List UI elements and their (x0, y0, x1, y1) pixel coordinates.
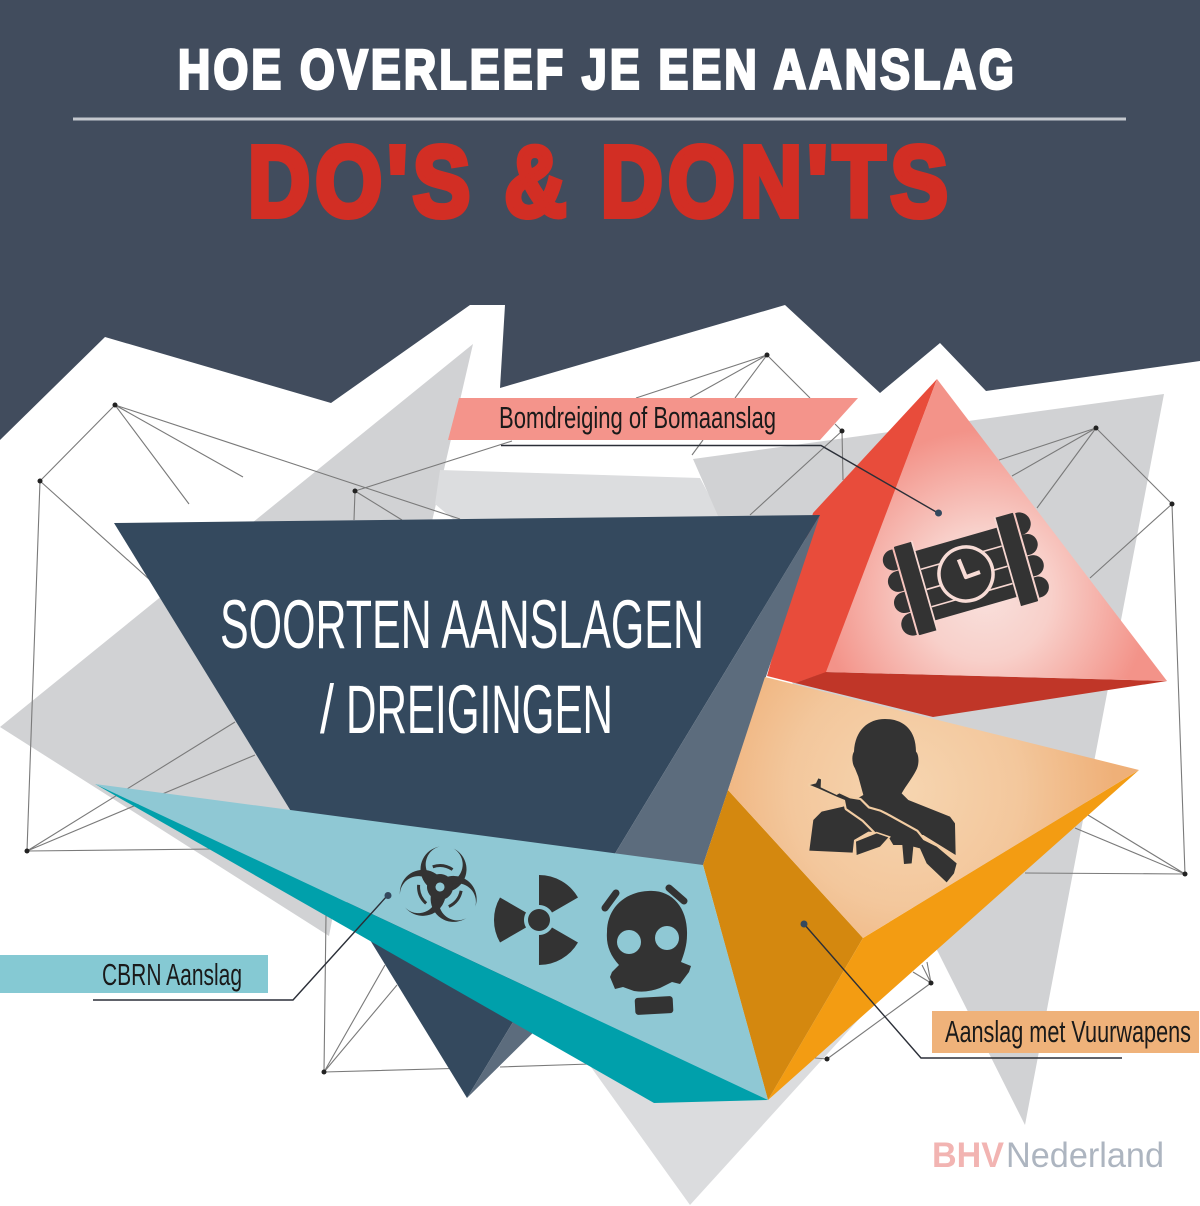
logo: BHV Nederland (932, 1136, 1164, 1175)
grey background shards (0, 344, 1164, 1205)
label: bomdreiging of bomaanslag (448, 398, 858, 440)
label: CBRN aanslag (0, 955, 268, 993)
main heading text: / (320, 671, 335, 748)
callout line: bomb (501, 446, 942, 516)
cyan pyramid: CBRN (95, 784, 768, 1103)
callout line: CBRN (93, 892, 392, 1000)
subtitle: do's and don'ts: DO'S & DON'TS (248, 126, 953, 238)
callout line: firearms (800, 920, 1122, 1058)
dark header background (0, 0, 1200, 440)
main heading text (220, 586, 704, 748)
label: CBRN aanslag: CBRN Aanslag (102, 957, 242, 992)
icon: gas mask (605, 888, 691, 1015)
red pyramid: bomb (767, 379, 1167, 717)
label: bomdreiging of bomaanslag: Bomdreiging of Bomaanslag (499, 400, 776, 435)
navy pyramid: soorten aanslagen (114, 515, 820, 1098)
logo: BHV Nederland: Nederland (1006, 1136, 1164, 1175)
icon: man with rifle (809, 719, 957, 882)
icon: biohazard (388, 841, 491, 934)
icon: dynamite bomb (879, 507, 1053, 641)
main heading text: SOORTEN AANSLAGEN (220, 586, 704, 663)
network lines and nodes (24, 352, 1188, 1074)
icon: radiation (481, 875, 578, 976)
orange pyramid: firearms (703, 677, 1139, 1100)
title divider (73, 118, 1126, 120)
title: hoe overleef je een aanslag: HOE OVERLEEF JE EEN AANSLAG (178, 38, 1017, 100)
logo: BHV Nederland: BHV (932, 1136, 1005, 1175)
main heading text: DREIGINGEN (346, 671, 613, 748)
